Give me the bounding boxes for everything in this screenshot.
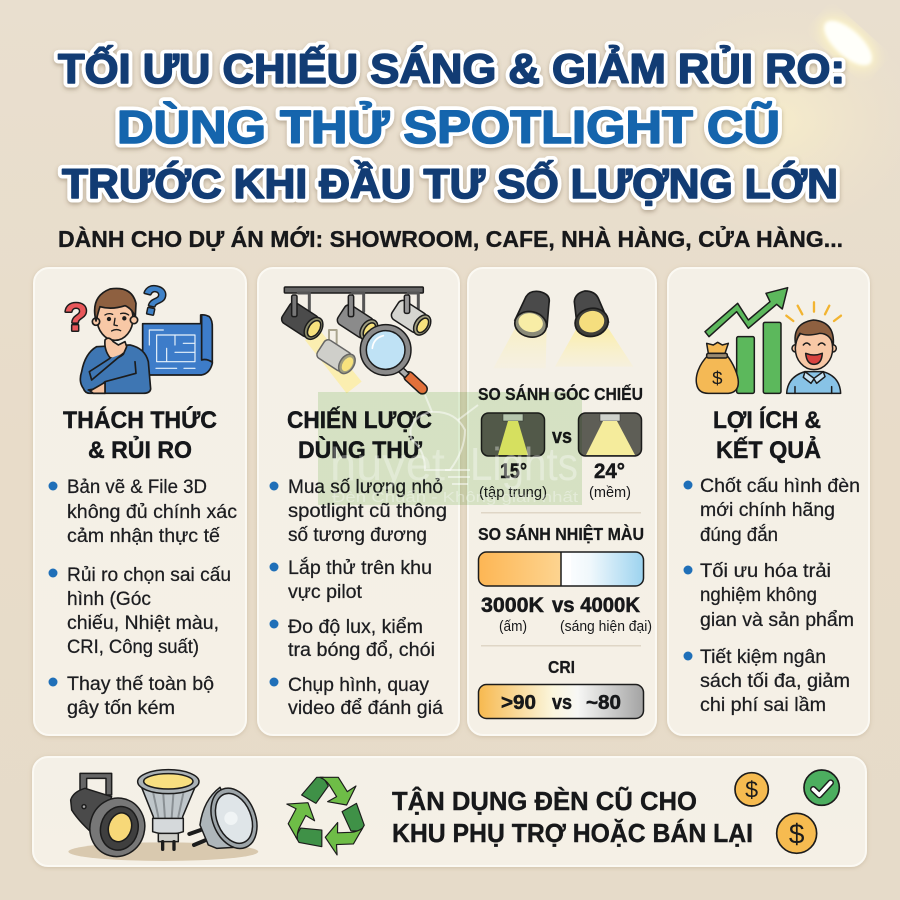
icon: growth chart, money bag and happy man: $	[712, 367, 723, 388]
bullet list: spotlight cũ thông	[288, 500, 447, 522]
heading: LỢI ÍCH &	[713, 406, 821, 434]
bullet list: video để đánh giá	[288, 697, 443, 719]
title: TRƯỚC KHI ĐẦU TƯ SỐ LƯỢNG LỚN	[62, 159, 838, 207]
bullet list: tra bóng đổ, chói	[288, 639, 435, 661]
title: DÙNG THỬ SPOTLIGHT CŨ	[117, 101, 780, 153]
bullet list: Chốt cấu hình đèn	[700, 475, 860, 497]
bullet list: sách tối đa, giảm	[700, 670, 850, 692]
bullet list: chiếu, Nhiệt màu,	[67, 612, 219, 634]
bullet list: gian và sản phẩm	[700, 609, 854, 631]
bullet list: Thay thế toàn bộ	[67, 673, 214, 695]
panel: benefits and results	[668, 268, 869, 735]
panel: challenges and risks	[34, 268, 246, 735]
corner spotlight glow	[640, 5, 900, 235]
CRI bar: >90	[501, 692, 536, 714]
watermark: huyet	[330, 438, 445, 490]
icon: old spotlight and bulbs	[68, 770, 265, 863]
bullet list: Bản vẽ & File 3D	[67, 476, 207, 498]
icon: coins and check	[735, 770, 839, 853]
colour temperature bar	[478, 552, 644, 586]
heading	[713, 406, 821, 464]
heading: CHIẾN LƯỢC	[287, 406, 432, 434]
CRI bar: ~80	[586, 692, 621, 714]
heading: DÙNG THỬ	[298, 435, 422, 464]
label vs: vs	[552, 426, 572, 448]
bullet list	[48, 476, 237, 719]
values: beam angles: 15°	[500, 460, 527, 483]
icon: coins and check: $	[789, 818, 805, 849]
bullet list: đúng đắn	[700, 523, 778, 546]
bullet list: Chụp hình, quay	[288, 674, 429, 696]
bottom message: KHU PHỤ TRỢ HOẶC BÁN LẠI	[392, 818, 753, 848]
values: colour temperature: (sáng hiện đại)	[560, 619, 652, 635]
heading: beam angle comparison: SO SÁNH GÓC CHIẾU	[478, 383, 643, 404]
icon: worried man with blueprint: ?	[64, 295, 88, 339]
values: beam angles: 24°	[594, 460, 625, 483]
values: beam angles: (tập trung)	[479, 485, 547, 501]
bullet list: nghiệm không	[700, 584, 817, 606]
icon: recycle symbol	[279, 777, 372, 859]
heading: colour temperature comparison: SO SÁNH NHIỆT MÀU	[478, 523, 644, 544]
bullet list	[684, 475, 860, 716]
bullet list: mới chính hãng	[700, 499, 835, 521]
icon: growth chart, money bag and happy man	[696, 288, 841, 393]
values: colour temperature	[481, 594, 652, 635]
values: colour temperature: vs 4000K	[552, 594, 640, 617]
bullet list: Tối ưu hóa trải	[700, 560, 831, 582]
values: beam angles	[479, 460, 631, 501]
bullet list: gây tốn kém	[67, 697, 175, 719]
bullet list: cảm nhận thực tế	[67, 525, 220, 547]
beam diagram 24 degrees	[578, 413, 642, 456]
title	[58, 44, 845, 207]
bullet list: vực pilot	[288, 581, 363, 603]
bullet list: Đo độ lux, kiểm	[288, 616, 423, 638]
icon: worried man with blueprint: ?	[137, 277, 170, 325]
bullet list: Tiết kiệm ngân	[700, 646, 826, 668]
title: TỐI ƯU CHIẾU SÁNG & GIẢM RỦI RO:	[58, 44, 845, 92]
heading: & RỦI RO	[88, 435, 192, 464]
icon: two spotlights with beams	[493, 291, 633, 368]
values: colour temperature: 3000K	[481, 594, 544, 617]
bottom message	[392, 786, 753, 848]
bullet list: không đủ chính xác	[67, 501, 237, 523]
icon: track spotlights with magnifier	[280, 287, 434, 393]
watermark: Lights	[470, 438, 578, 490]
subtitle: DÀNH CHO DỰ ÁN MỚI: SHOWROOM, CAFE, NHÀ HÀNG, CỬA HÀNG...	[58, 224, 843, 252]
bullet list: hình (Góc	[67, 588, 151, 610]
bullet list: Mua số lượng nhỏ	[288, 476, 443, 498]
panel: trial strategy	[258, 268, 459, 735]
values: beam angles: (mềm)	[589, 485, 631, 501]
beam diagram 15 degrees	[482, 413, 544, 456]
heading	[63, 406, 217, 464]
values: colour temperature: (ấm)	[499, 619, 527, 635]
bullet list: chi phí sai lầm	[700, 694, 826, 716]
title: TRƯỚC KHI ĐẦU TƯ SỐ LƯỢNG LỚN	[62, 159, 838, 207]
watermark: Đèn Chuẩn - Không gian nhất	[332, 489, 579, 506]
watermark	[318, 392, 582, 506]
icon: coins and check: $	[745, 777, 758, 803]
bullet list: Rủi ro chọn sai cấu	[67, 564, 231, 586]
icon: worried man with blueprint	[64, 277, 212, 393]
bullet list	[270, 476, 447, 719]
title: TỐI ƯU CHIẾU SÁNG & GIẢM RỦI RO:	[58, 44, 845, 92]
panel: comparisons	[468, 268, 656, 735]
bullet list: số tương đương	[288, 524, 427, 546]
bottom message: TẬN DỤNG ĐÈN CŨ CHO	[392, 786, 697, 816]
bullet list: Lắp thử trên khu	[288, 556, 432, 579]
CRI bar: vs	[552, 692, 572, 714]
title: DÙNG THỬ SPOTLIGHT CŨ	[117, 101, 780, 153]
heading: THÁCH THỨC	[63, 406, 217, 434]
heading: CRI: CRI	[548, 657, 575, 677]
CRI bar	[478, 684, 644, 718]
bullet list: CRI, Công suất)	[67, 636, 199, 658]
heading	[287, 406, 432, 464]
panel: reuse old lights	[33, 757, 866, 866]
heading: KẾT QUẢ	[716, 435, 821, 464]
